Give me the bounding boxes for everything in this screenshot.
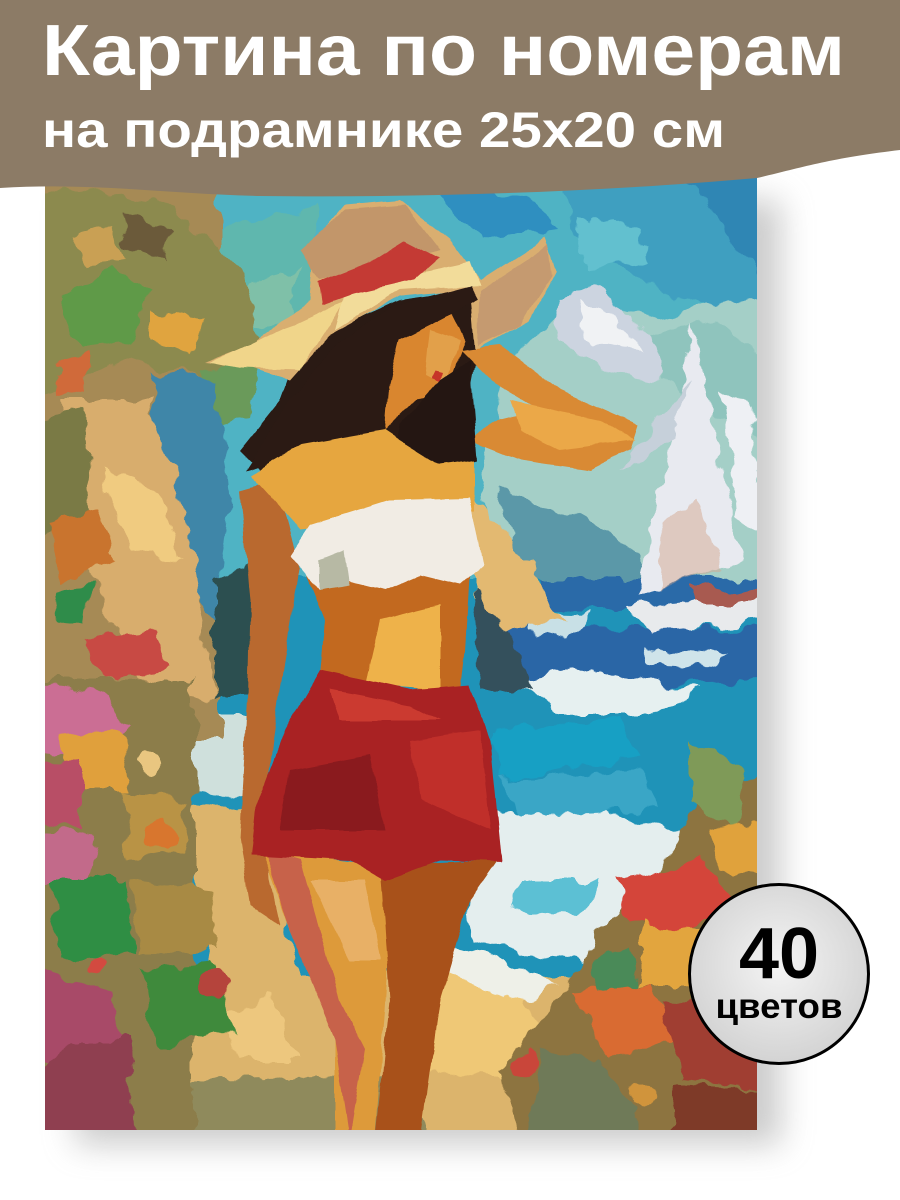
face bbox=[385, 310, 465, 430]
sea bbox=[180, 578, 780, 978]
chest bbox=[250, 430, 475, 530]
badge: 40 colours: 40 bbox=[739, 914, 819, 994]
canvas drop shadow bbox=[75, 200, 781, 1145]
flowers left bbox=[30, 630, 235, 1150]
scenery bbox=[30, 150, 780, 1150]
header band bbox=[0, 0, 900, 196]
woman figure bbox=[205, 200, 638, 1140]
badge: 40 colours bbox=[690, 884, 868, 1064]
hair back bbox=[240, 290, 480, 480]
cliff and foliage left bbox=[30, 180, 565, 740]
sky bbox=[214, 178, 757, 584]
white top bbox=[290, 498, 483, 590]
sand path bbox=[190, 804, 388, 980]
raised arm bbox=[460, 345, 638, 470]
badge: 40 colours: цветов bbox=[716, 987, 842, 1026]
left arm bbox=[240, 480, 300, 925]
painting background bbox=[296, 976, 570, 1019]
front hair bbox=[245, 285, 478, 470]
subtitle: на подрамнике 25х20 см bbox=[42, 102, 725, 158]
painting: woman on the beach bbox=[30, 150, 780, 1150]
torso bbox=[305, 570, 470, 695]
legs bbox=[262, 850, 392, 1140]
distant headland bbox=[500, 490, 650, 590]
hat bbox=[205, 200, 556, 380]
sailboat bbox=[620, 325, 770, 632]
flowers right bbox=[498, 742, 757, 1130]
red shorts bbox=[250, 670, 502, 880]
title: Картина по номерам bbox=[42, 11, 845, 91]
